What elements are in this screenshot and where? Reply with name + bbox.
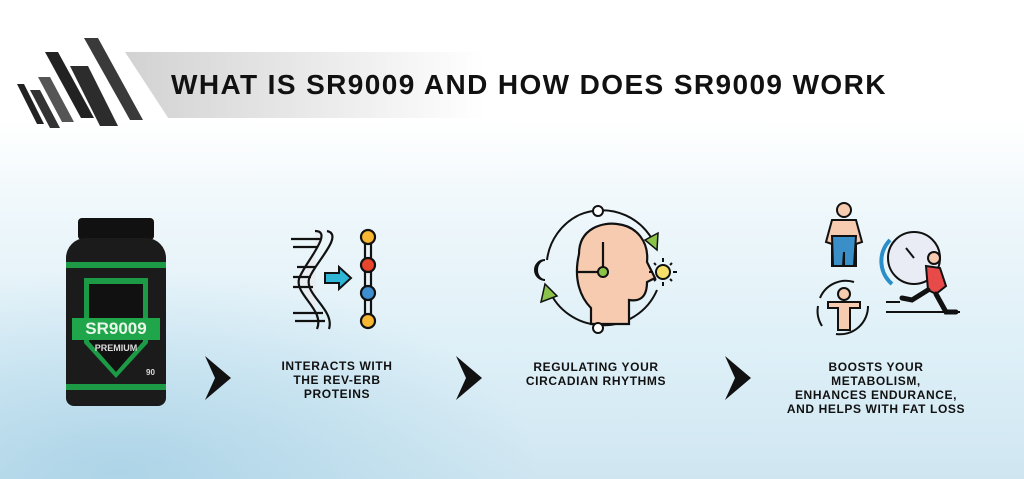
icon: DNA to protein: [291, 228, 376, 330]
label 3: AND HELPS WITH FAT LOSS: [787, 402, 965, 416]
title: WHAT IS SR9009 AND HOW DOES SR9009 WORK: [171, 69, 887, 100]
label 2: REGULATING YOUR: [533, 360, 659, 374]
label 1: INTERACTS WITH: [281, 359, 393, 373]
label 1: THE REV-ERB: [293, 373, 381, 387]
chevron 3: [725, 356, 751, 400]
logo: [17, 38, 143, 128]
icon: circadian head: [534, 205, 677, 334]
label 1: PROTEINS: [304, 387, 370, 401]
label 3: ENHANCES ENDURANCE,: [795, 388, 957, 402]
label 2: [526, 360, 666, 388]
icon: metabolism / endurance: [816, 202, 960, 336]
chevron 1: [205, 356, 231, 400]
label 1: [281, 359, 393, 401]
label 2: CIRCADIAN RHYTHMS: [526, 374, 666, 388]
label 3: BOOSTS YOUR: [828, 360, 924, 374]
product bottle: 90: [146, 368, 155, 377]
chevron 2: [456, 356, 482, 400]
label 3: [787, 360, 965, 416]
product bottle: [66, 218, 166, 406]
title banner: [125, 52, 420, 118]
label 3: METABOLISM,: [831, 374, 921, 388]
product bottle: SR9009: [85, 319, 147, 338]
product bottle: PREMIUM: [95, 343, 137, 353]
